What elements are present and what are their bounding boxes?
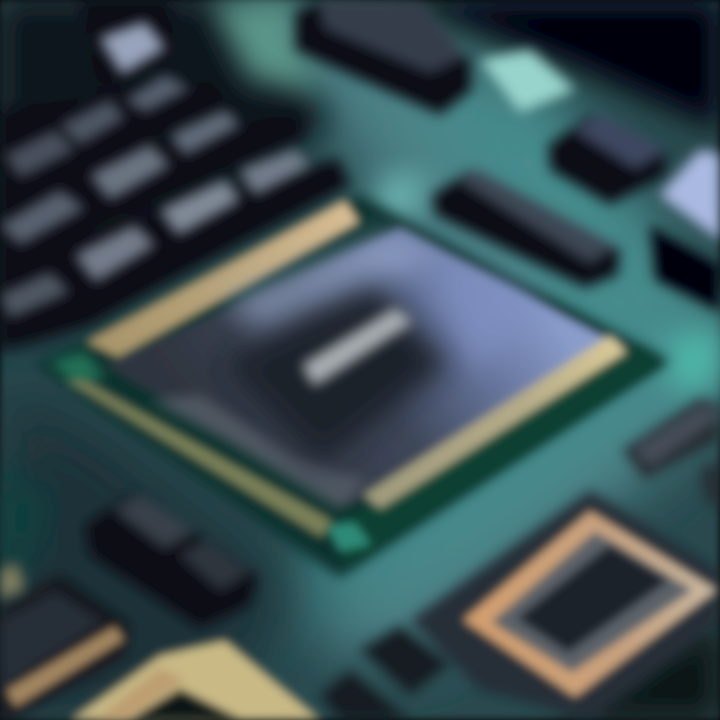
small dark parts, bottom centre — [320, 625, 450, 720]
chip with gold ring, bottom centre — [70, 640, 320, 720]
dark block, lower left — [85, 492, 258, 628]
key rows: dark bases — [0, 0, 350, 350]
inner dark die — [222, 285, 450, 465]
dark component, centre right — [432, 170, 620, 288]
chip base: green substrate — [35, 195, 670, 578]
light reflection on chip top — [225, 232, 440, 335]
dark chip with gold edge, bottom left — [0, 564, 130, 720]
tan edge: lower left — [65, 380, 332, 538]
dark component, right of top — [548, 115, 665, 205]
chip body — [105, 228, 620, 505]
dark component, top centre — [295, 0, 472, 115]
key tops: grey highlights — [0, 22, 310, 318]
chip label — [302, 308, 413, 386]
keyboard-like key array, upper left — [0, 0, 350, 350]
grey component, right edge — [622, 398, 720, 510]
central chip — [35, 195, 670, 578]
gold edge: lower right — [362, 335, 628, 510]
chip with gold ring, lower right — [410, 490, 720, 720]
dark component with light top, right edge — [650, 150, 720, 312]
gold edge: upper left — [85, 200, 360, 358]
